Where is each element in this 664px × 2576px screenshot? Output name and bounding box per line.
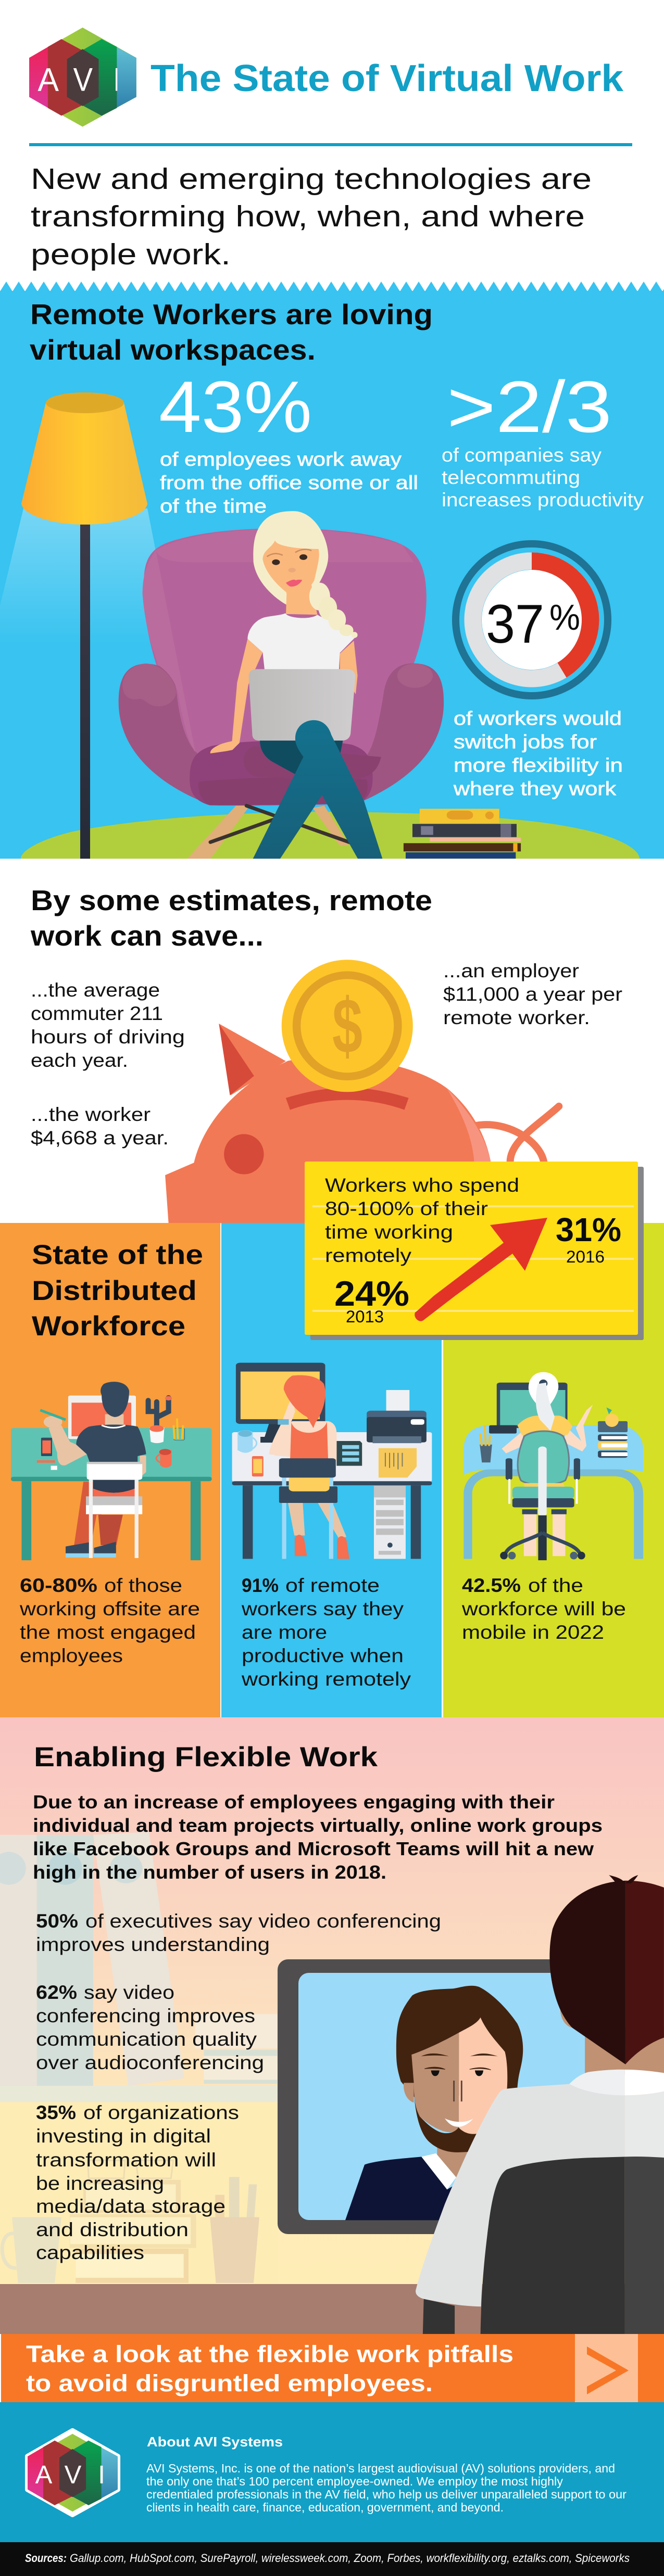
value: 2013: 24% [334,1274,409,1313]
text: engaged employees: working offsite are [19,1598,200,1619]
footer logo: I [98,2461,105,2489]
text: commuter savings [31,979,185,1149]
stat: 35%: investing in digital [36,2125,211,2147]
stat text: 37%: more flexibility in [454,755,623,776]
stat: >2/3: >2/3 [447,366,612,448]
stat: 62%: over audioconferencing [36,2052,264,2073]
text: employer savings: remote worker. [443,1007,590,1028]
text: mobile workforce: workforce will be [461,1598,626,1619]
armchair and woman [119,511,444,859]
about heading: About AVI Systems [147,2434,283,2450]
call to action text [26,2341,513,2396]
heading: remote workers: virtual workspaces. [30,334,316,366]
text: productive workers [241,1575,411,1690]
panel: enabling flexible work [0,1717,664,2334]
chevron button [575,2334,638,2402]
stat: 43%: of employees work away [160,449,402,470]
stat: 35%: media/data storage [36,2196,225,2217]
about body text: credentialed professionals in the AV field, who help us deliver unparalleled support to our [146,2488,627,2501]
text: engaged employees: of those [104,1575,182,1596]
panel: distributed workforce columns [0,1223,664,1717]
card text: 80-100% of their [325,1198,488,1219]
trend arrow [415,1218,547,1321]
illustration: man at desk [11,1382,212,1560]
heading: distributed workforce: Workforce [32,1311,185,1342]
text: commuter savings: $4,668 a year. [31,1127,169,1149]
footer logo: A [35,2461,53,2489]
stat: 62%: conferencing improves [36,2005,255,2026]
heading: remote workers: Remote Workers are loving [30,298,433,330]
stat: >2/3: of companies say [442,444,602,466]
footer logo: V [65,2461,82,2489]
heading: savings: work can save... [30,920,264,952]
text: productive workers: are more [242,1622,327,1643]
text: mobile workforce [461,1575,626,1643]
text: commuter savings: hours of driving [31,1026,185,1048]
video call monitor [278,1959,611,2234]
stat: >2/3 [442,366,644,511]
call to action text: to avoid disgruntled employees. [26,2370,433,2396]
stat: 35%: of organizations [83,2102,239,2123]
sources bar [0,2542,664,2576]
call to action banner [1,2334,664,2402]
intro paragraph: individual and team projects virtually, online work groups [33,1815,603,1836]
heading: savings: By some estimates, remote [31,884,432,916]
value: 2016 [556,1211,621,1266]
intro text [31,162,592,271]
card text [325,1175,519,1266]
donut chart: 37% [456,544,608,696]
sources bar: Sources: [25,2552,67,2565]
text: productive workers: of remote [285,1575,380,1596]
text: commuter savings: commuter 211 [31,1003,163,1024]
stat: >2/3: increases productivity [442,489,644,511]
about body text: AVI Systems, Inc. is one of the nation’s largest audiovisual (AV) solutions providers, and [146,2462,615,2475]
stat: 50% [36,1910,441,1955]
stat: 62%: communication quality [36,2029,257,2050]
header logo: A [37,61,59,98]
text: mobile workforce: of the [528,1575,583,1596]
faded office background [0,1832,277,2285]
header logo: I [114,61,119,98]
desk [0,2284,664,2334]
stat text: 37%: of workers would [454,708,622,729]
heading: enabling flexible work: Enabling Flexible Work [34,1742,378,1772]
value: 2013: 2013 [346,1307,384,1326]
text: employer savings: ...an employer [443,960,579,981]
stat: 43%: 43% [159,366,312,448]
text: commuter savings: ...the average [31,979,160,1001]
intro text: people work. [31,238,231,271]
heading: remote workers [30,298,433,366]
text: employer savings [443,960,622,1028]
stat: 50%: 50% [36,1910,78,1932]
donut chart: 37%: 37 [486,594,544,655]
intro paragraph [33,1791,603,1883]
heading: distributed workforce: Distributed [32,1276,197,1306]
intro paragraph: Due to an increase of employees engaging with their [33,1791,555,1813]
stat: 35% [36,2102,239,2263]
stat: 62%: say video [84,1982,174,2003]
title: The State of Virtual Work [151,58,624,99]
stat text: 37% [453,708,623,799]
stat: 35%: transformation will [36,2149,216,2171]
stat: 50%: improves understanding [36,1934,270,1955]
text: commuter savings: each year. [31,1050,128,1071]
coin dollar sign: $ [332,982,362,1069]
text: engaged employees: 60-80% [20,1575,97,1596]
stat: 43% [159,366,418,517]
ground [21,812,640,859]
stat: 35%: and distribution [36,2219,189,2240]
text: productive workers: 91% [242,1575,279,1596]
about body text: the only one that’s 100 percent employee-owned. We employ the most highly [146,2475,563,2488]
panel: savings [30,884,622,1223]
footer logo [28,2431,118,2515]
header logo: V [73,61,93,98]
stack of books [404,809,521,859]
stat: 35%: be increasing [36,2173,164,2194]
intro text: New and emerging technologies are [31,162,592,196]
text: engaged employees: the most engaged [20,1622,196,1643]
stat: 43%: from the office some or all [160,472,418,493]
stat text: 37%: where they work [453,778,617,799]
stat: 50%: of executives say video conferencing [85,1910,441,1932]
text: productive workers: productive when [242,1645,404,1666]
intro paragraph: high in the number of users in 2018. [33,1861,386,1883]
card text: remotely [325,1245,412,1266]
about body text [146,2462,627,2514]
panel: remote workers [0,282,664,859]
footer panel: about [0,2402,664,2542]
header rule [29,143,632,146]
man on screen [345,1986,523,2220]
intro paragraph: like Facebook Groups and Microsoft Teams will hit a new [33,1838,594,1859]
heading: distributed workforce: State of the [32,1240,203,1270]
illustration: woman at desk [232,1363,432,1559]
value: 2016: 31% [556,1211,621,1248]
piggy bank [165,960,559,1223]
stat: 43%: of the time [160,495,267,517]
intro text: transforming how, when, and where [31,200,585,233]
heading: savings [30,884,432,952]
foreground man from behind [416,1875,664,2334]
card text: time working [325,1221,453,1243]
text: mobile workforce: 42.5% [462,1575,521,1596]
text: engaged employees: employees [20,1645,123,1666]
text: engaged employees [19,1575,200,1666]
card text: Workers who spend [325,1175,519,1196]
stat: 35%: 35% [36,2102,76,2123]
text: employer savings: $11,000 a year per [443,984,622,1005]
heading: distributed workforce [32,1240,203,1342]
illustration: woman from behind [463,1372,643,1560]
callout: yellow chart card [305,1162,644,1340]
value: 2016: 2016 [566,1247,605,1266]
floor lamp [0,392,195,859]
stat: 35%: capabilities [36,2242,144,2263]
text: mobile workforce: mobile in 2022 [462,1622,604,1643]
text: productive workers: working remotely [241,1668,411,1690]
stat: 62% [36,1982,264,2073]
header logo [29,28,136,126]
call to action text: Take a look at the flexible work pitfalls [26,2341,513,2367]
text: productive workers: workers say they [241,1598,404,1619]
stat: 62%: 62% [36,1982,77,2003]
stat text: 37%: switch jobs for [454,731,597,753]
sources bar: Gallup.com, HubSpot.com, SurePayroll, wirelessweek.com, Zoom, Forbes, workflexibility.org, eztalks.com, Spiceworks [70,2552,630,2565]
text: commuter savings: ...the worker [31,1104,151,1125]
about body text: clients in health care, finance, education, government, and beyond. [146,2501,504,2514]
stat: >2/3: telecommuting [442,467,580,488]
donut chart: 37%: % [549,597,580,637]
